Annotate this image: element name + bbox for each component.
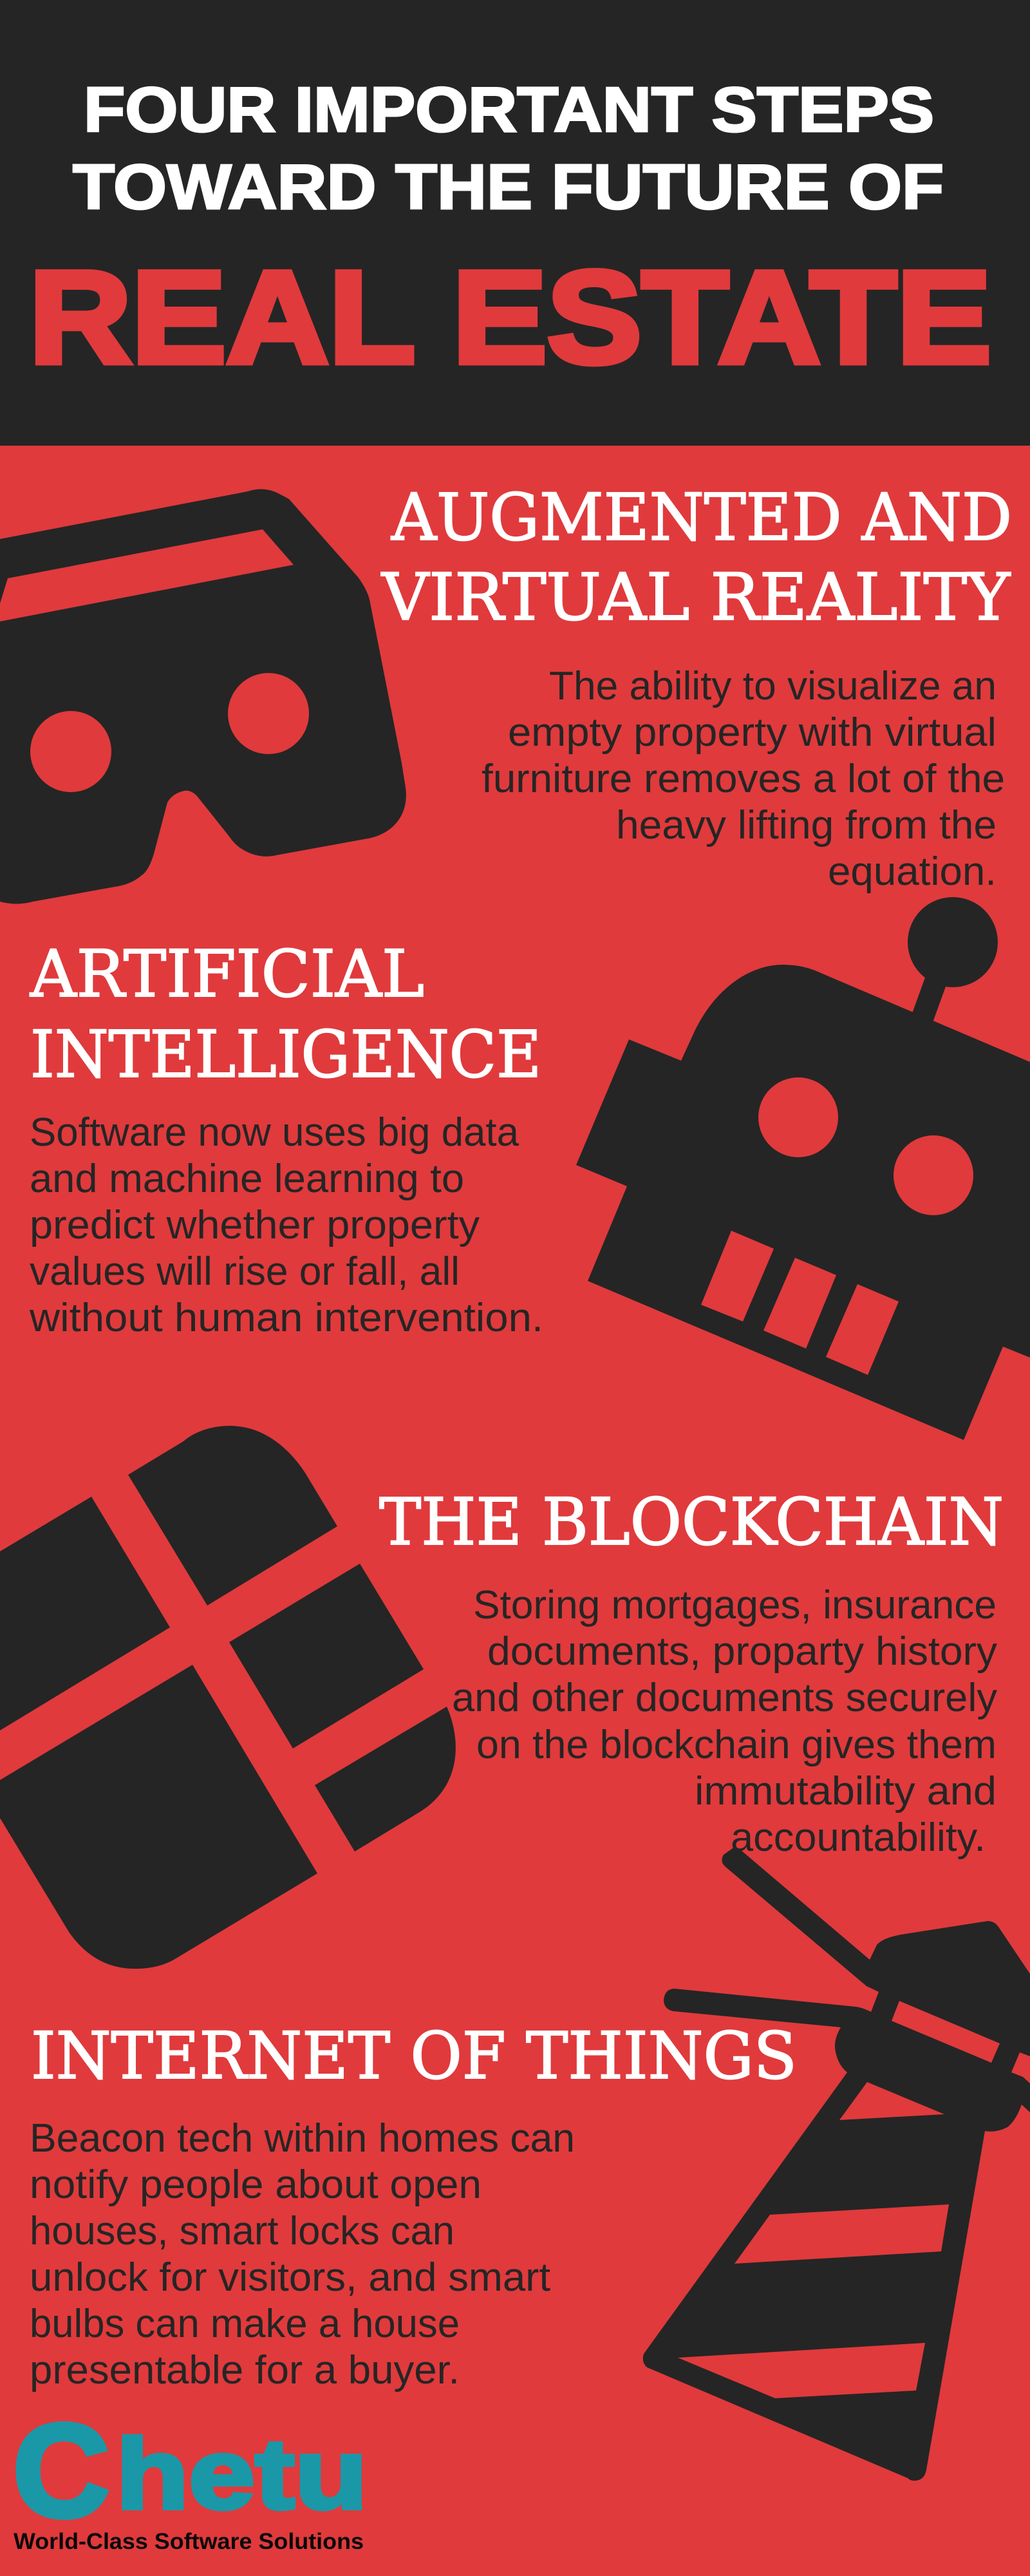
heading: the blockchain: THE BLOCKCHAIN [379,1484,1004,1560]
text block: the blockchain: documents, proparty history [487,1629,997,1674]
text block: internet of things: Beacon tech within homes can [30,2116,575,2161]
logo: Chetu [13,2397,368,2554]
text block: artificial intelligence: and machine learning to [30,1157,464,1201]
heading: artificial intelligence: INTELLIGENCE [30,1017,541,1092]
text block: augmented and virtual reality: heavy lifting from the [616,803,997,848]
header banner [0,0,1030,446]
text block: augmented and virtual reality [482,664,1005,894]
title: REAL ESTATE [29,244,991,391]
text block: the blockchain: and other documents securely [452,1676,997,1720]
title [29,74,991,391]
icon: smart device with antennas [643,1848,1030,2481]
text block: the blockchain: accountability. [731,1815,986,1860]
heading: augmented and virtual reality [381,480,1012,635]
icon: blockchain grid [0,1426,456,1969]
icon: robot [576,897,1030,1440]
text block: augmented and virtual reality: furniture removes a lot of the [482,757,1005,801]
heading: artificial intelligence: ARTIFICIAL [30,936,424,1012]
text block: internet of things: bulbs can make a house [30,2302,460,2346]
text block: the blockchain: immutability and [695,1769,997,1814]
text block: the blockchain [452,1583,997,1860]
logo: Chetu: World-Class Software Solutions [14,2529,364,2554]
text block: internet of things: notify people about open [30,2163,482,2207]
heading: artificial intelligence [30,936,541,1092]
heading: internet of things: INTERNET OF THINGS [31,2018,797,2094]
text block: augmented and virtual reality: equation. [828,849,997,894]
logo: Chetu: C [13,2397,109,2544]
text block: augmented and virtual reality: The ability to visualize an [549,664,997,708]
text block: internet of things: houses, smart locks can [30,2209,454,2253]
text block: internet of things: presentable for a buyer. [30,2348,460,2392]
text block: artificial intelligence: without human intervention. [29,1296,543,1340]
text block: artificial intelligence [29,1110,543,1340]
text block: internet of things [30,2116,575,2392]
logo: Chetu: hetu [116,2418,368,2530]
text block: the blockchain: Storing mortgages, insurance [473,1583,997,1627]
title: FOUR IMPORTANT STEPS [84,74,934,145]
title: TOWARD THE FUTURE OF [73,151,944,222]
text block: artificial intelligence: values will rise or fall, all [30,1249,460,1294]
text block: the blockchain: on the blockchain gives them [476,1723,997,1767]
icon: VR headset [0,489,406,904]
text block: internet of things: unlock for visitors, and smart [30,2255,550,2300]
text block: augmented and virtual reality: empty property with virtual [508,710,997,755]
text block: artificial intelligence: predict whether property [30,1203,480,1247]
heading: augmented and virtual reality: AUGMENTED AND [391,480,1012,555]
heading: augmented and virtual reality: VIRTUAL REALITY [381,560,1011,635]
text block: artificial intelligence: Software now uses big data [30,1110,520,1155]
